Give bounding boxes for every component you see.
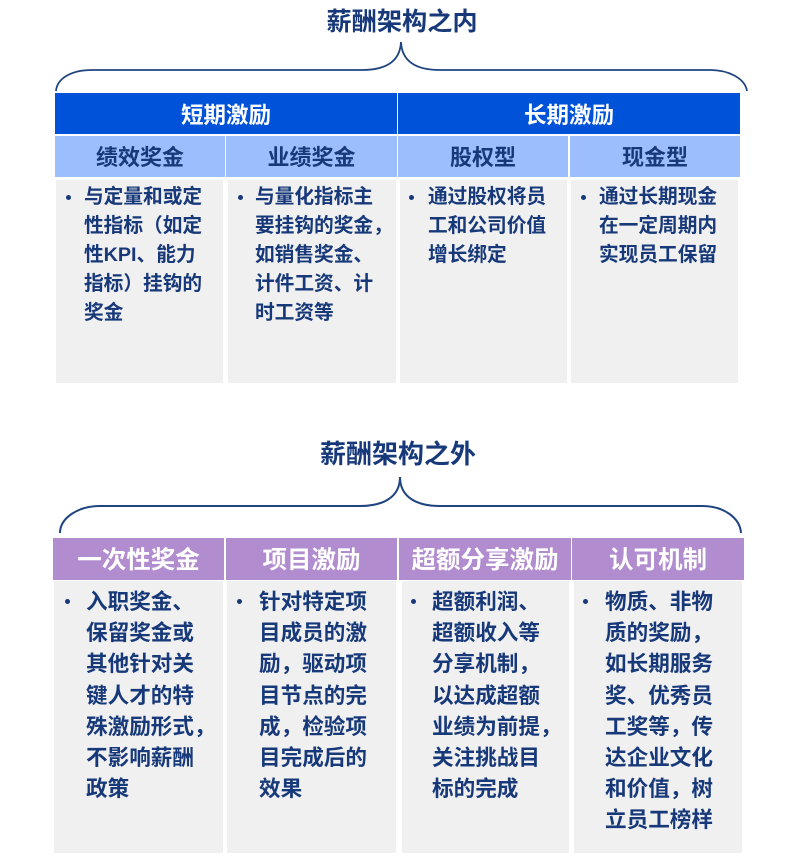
column header: results bonus — [226, 136, 397, 177]
text: recognition: 立员工榜样 — [605, 807, 713, 832]
panel: results bonus description — [228, 180, 396, 383]
brace: inside pay structure — [55, 42, 748, 92]
panel: one-off bonus description — [54, 581, 223, 853]
text: equity: 增长绑定 — [428, 244, 507, 266]
text: recognition: 和价值，树 — [605, 776, 713, 801]
panel: performance bonus description — [56, 180, 223, 383]
column header: performance bonus: 绩效奖金 — [96, 144, 184, 170]
text: recognition: 奖、优秀员 — [605, 683, 713, 708]
text: equity — [428, 186, 546, 266]
text: one-off bonus: 键人才的特 — [86, 683, 194, 708]
column header: performance bonus — [55, 136, 225, 177]
text: one-off bonus: 其他针对关 — [86, 651, 194, 676]
text: project incentive: 励，驱动项 — [259, 651, 367, 676]
text: recognition: 达企业文化 — [605, 745, 713, 770]
bullet — [583, 599, 588, 604]
text: cash: 在一定周期内 — [599, 215, 717, 237]
panel: project incentive description — [227, 581, 396, 853]
text: one-off bonus: 政策 — [86, 776, 129, 801]
text: excess sharing: 关注挑战目 — [432, 745, 540, 770]
column header: excess profit sharing — [399, 538, 571, 580]
bullet — [65, 599, 70, 604]
text: excess sharing: 标的完成 — [432, 776, 518, 801]
column header: project incentive: 项目激励 — [262, 546, 360, 574]
column header: excess profit sharing: 超额分享激励 — [412, 546, 558, 574]
text: project incentive: 成，检验项 — [259, 714, 367, 739]
text: performance bonus: 指标）挂钩的 — [84, 273, 202, 295]
title: outside pay structure: 薪酬架构之外 — [320, 439, 476, 469]
text: performance bonus: 奖金 — [84, 302, 123, 324]
text: one-off bonus — [86, 589, 216, 801]
text: excess sharing — [432, 589, 562, 801]
column header: results bonus: 业绩奖金 — [267, 144, 356, 170]
text: equity: 通过股权将员 — [428, 186, 546, 208]
text: excess sharing: 超额收入等 — [432, 620, 540, 645]
panel: long-term incentive header: 长期激励 — [524, 102, 614, 128]
text: cash: 通过长期现金 — [599, 186, 717, 208]
text: one-off bonus: 殊激励形式， — [86, 714, 216, 739]
text: results bonus: 如销售奖金、 — [255, 244, 373, 266]
text: performance bonus — [84, 186, 202, 324]
text: one-off bonus: 保留奖金或 — [86, 620, 194, 645]
bullet — [237, 599, 242, 604]
text: excess sharing: 以达成超额 — [432, 683, 540, 708]
text: recognition: 工奖等，传 — [605, 714, 713, 739]
text: cash: 实现员工保留 — [599, 244, 717, 266]
text: cash — [599, 186, 717, 266]
text: recognition: 物质、非物 — [605, 589, 713, 614]
text: results bonus: 计件工资、计 — [255, 273, 373, 295]
text: performance bonus: 性指标（如定 — [84, 215, 202, 237]
text: project incentive: 目成员的激 — [259, 620, 367, 645]
column header: one-off bonus — [53, 538, 224, 580]
panel: equity description — [400, 180, 567, 383]
text: performance bonus: 性KPI、能力 — [84, 244, 196, 266]
text: results bonus: 与量化指标主 — [255, 186, 373, 208]
text: one-off bonus: 不影响薪酬 — [86, 745, 194, 770]
column header: equity — [398, 136, 568, 177]
panel: long-term incentive header — [398, 93, 740, 134]
column header: cash — [570, 136, 740, 177]
text: project incentive: 针对特定项 — [259, 589, 367, 614]
text: project incentive: 效果 — [259, 776, 302, 801]
column header: recognition — [572, 538, 744, 580]
text: recognition: 质的奖励， — [605, 620, 713, 645]
text: results bonus: 要挂钩的奖金， — [255, 215, 393, 237]
panel: excess sharing description — [402, 581, 569, 853]
text: excess sharing: 分享机制， — [432, 651, 540, 676]
panel: cash description — [571, 180, 738, 383]
text: equity: 工和公司价值 — [428, 215, 546, 237]
text: project incentive: 目完成后的 — [259, 745, 367, 770]
text: results bonus: 时工资等 — [255, 302, 334, 324]
text: recognition — [605, 589, 713, 832]
bullet — [66, 195, 71, 200]
brace: outside pay structure — [59, 477, 742, 534]
bullet — [411, 599, 416, 604]
bullet — [238, 195, 243, 200]
column header: equity: 股权型 — [450, 144, 516, 170]
column header: one-off bonus: 一次性奖金 — [77, 546, 200, 574]
column header: project incentive — [226, 538, 397, 580]
text: excess sharing: 超额利润、 — [432, 589, 540, 614]
column header: cash: 现金型 — [622, 144, 688, 170]
title: inside pay structure: 薪酬架构之内 — [326, 8, 478, 36]
panel: short-term incentive header: 短期激励 — [181, 102, 271, 128]
text: project incentive: 目节点的完 — [259, 683, 367, 708]
text: excess sharing: 业绩为前提， — [432, 714, 562, 739]
panel: recognition description — [574, 581, 742, 853]
text: performance bonus: 与定量和或定 — [84, 186, 202, 208]
column header: recognition: 认可机制 — [609, 546, 707, 574]
bullet — [581, 195, 586, 200]
bullet — [409, 195, 414, 200]
text: recognition: 如长期服务 — [605, 651, 713, 676]
text: results bonus — [255, 186, 393, 324]
panel: short-term incentive header — [55, 93, 397, 134]
text: one-off bonus: 入职奖金、 — [86, 589, 194, 614]
text: project incentive — [259, 589, 367, 801]
